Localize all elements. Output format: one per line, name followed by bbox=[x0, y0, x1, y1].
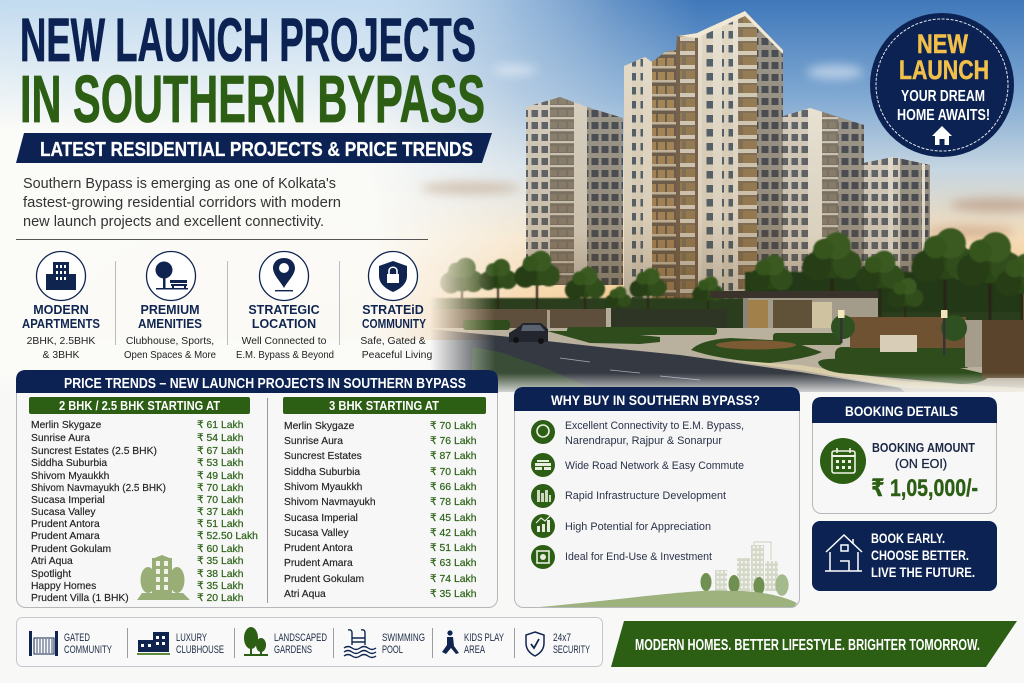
hedges and landscaping bbox=[463, 320, 990, 384]
reason: connectivity bbox=[531, 420, 744, 447]
column: 3 BHK prices: Merlin Skygaze bbox=[284, 421, 355, 432]
amenity: kids play area: KIDS PLAY bbox=[464, 632, 504, 644]
feature: strategic location bbox=[236, 252, 334, 361]
booking header bbox=[812, 397, 997, 423]
column: 2 BHK prices: Spotlight bbox=[31, 569, 71, 580]
feature: modern apartments: MODERN bbox=[33, 303, 89, 317]
reason: road network: Wide Road Network & Easy Commute bbox=[565, 460, 744, 472]
reason: appreciation bbox=[531, 514, 711, 538]
feature: strategic location: Well Connected to bbox=[242, 336, 327, 347]
callout: book early bbox=[812, 521, 997, 591]
tower: left bbox=[526, 95, 624, 290]
column: 2 BHK prices: ₹ 51 Lakh bbox=[197, 519, 244, 530]
column: 3 BHK prices: ₹ 51 Lakh bbox=[430, 543, 477, 554]
bottom fade bbox=[0, 373, 1024, 397]
column: 2 BHK prices: Siddha Suburbia bbox=[31, 458, 107, 469]
column: 2 BHK prices: Atri Aqua bbox=[31, 556, 73, 567]
feature: modern apartments: & 3BHK bbox=[43, 350, 80, 361]
column: 2 BHK prices: Happy Homes bbox=[31, 581, 96, 592]
column: 3 BHK prices: 3 BHK STARTING AT bbox=[329, 398, 439, 413]
panel: booking details bbox=[812, 397, 997, 514]
column: 2 BHK prices: ₹ 49 Lakh bbox=[197, 471, 244, 482]
column: 2 BHK prices: ₹ 20 Lakh bbox=[197, 593, 244, 604]
reason: infrastructure: Rapid Infrastructure Development bbox=[565, 490, 726, 502]
entrance pavilion bbox=[710, 291, 878, 328]
amenity: kids play area bbox=[442, 630, 504, 656]
title: NEW LAUNCH PROJECTS bbox=[20, 6, 476, 74]
subtitle banner: LATEST RESIDENTIAL PROJECTS & PRICE TRENDS bbox=[40, 138, 473, 161]
divider line bbox=[16, 239, 428, 240]
badge: new launch: NEW bbox=[917, 29, 968, 59]
column: 2 BHK prices: Sucasa Imperial bbox=[31, 495, 105, 506]
reason: connectivity: Excellent Connectivity to E.M. Bypass, bbox=[565, 420, 744, 432]
amenity: landscaped gardens: GARDENS bbox=[274, 644, 312, 656]
column: 2 BHK prices: ₹ 61 Lakh bbox=[197, 420, 244, 431]
icon: home bbox=[932, 126, 952, 145]
price panel header bbox=[16, 370, 498, 393]
callout text: CHOOSE BETTER. bbox=[871, 548, 969, 563]
column: 2 BHK prices: ₹ 67 Lakh bbox=[197, 446, 244, 457]
feature: community: Safe, Gated & bbox=[360, 336, 426, 347]
intro paragraph bbox=[23, 175, 341, 230]
column: 2 BHK prices: ₹ 35 Lakh bbox=[197, 581, 244, 592]
amenity: gated community: COMMUNITY bbox=[64, 644, 112, 656]
feature: premium amenities: PREMIUM bbox=[140, 303, 200, 317]
column: 3 BHK prices: Sucasa Imperial bbox=[284, 513, 358, 524]
amenity: swimming pool bbox=[344, 630, 425, 658]
ground masked group: trees, fence, road, hedges bbox=[420, 228, 1024, 392]
column: 3 BHK prices: Suncrest Estates bbox=[284, 451, 362, 462]
reason: road network bbox=[531, 453, 744, 477]
feature: modern apartments bbox=[22, 252, 100, 361]
feature: strategic location: LOCATION bbox=[252, 317, 316, 331]
booking amount text: ₹ 1,05,000/- bbox=[871, 475, 978, 502]
column: 3 BHK prices: Sunrise Aura bbox=[284, 436, 343, 447]
feature: community: COMMUNITY bbox=[362, 317, 427, 331]
amenity: security: SECURITY bbox=[553, 644, 590, 656]
amenity: gated community: GATED bbox=[64, 632, 90, 644]
tower: centre bbox=[624, 10, 784, 305]
feature: premium amenities: Clubhouse, Sports, bbox=[126, 336, 214, 347]
column: 3 BHK prices: ₹ 42 Lakh bbox=[430, 528, 477, 539]
column: 2 BHK prices: Merlin Skygaze bbox=[31, 420, 102, 431]
column: 2 BHK prices: ₹ 60 Lakh bbox=[197, 544, 244, 555]
tagline banner bbox=[611, 621, 1017, 667]
column: 3 BHK prices bbox=[283, 397, 486, 600]
column: 3 BHK prices: Prudent Antora bbox=[284, 543, 353, 554]
feature: community: Peaceful Living bbox=[362, 350, 432, 361]
subtitle banner bbox=[16, 133, 492, 163]
amenity: luxury clubhouse: CLUBHOUSE bbox=[176, 644, 224, 656]
callout text bbox=[871, 531, 975, 580]
tower: right bbox=[783, 108, 864, 273]
amenity: gated community bbox=[29, 631, 112, 656]
flower bed bbox=[716, 340, 796, 350]
booking header: BOOKING DETAILS bbox=[845, 403, 958, 419]
why buy header: WHY BUY IN SOUTHERN BYPASS? bbox=[551, 392, 760, 408]
hero photo: residential towers at sunset bbox=[0, 0, 1024, 397]
feature: community: STRATEiD bbox=[362, 303, 424, 317]
column: 2 BHK prices: Suncrest Estates (2.5 BHK) bbox=[31, 446, 157, 457]
title bbox=[20, 6, 485, 137]
reason: connectivity: Narendrapur, Rajpur & Sonarpur bbox=[565, 435, 722, 447]
amenity: landscaped gardens: LANDSCAPED bbox=[274, 632, 327, 644]
column: 2 BHK prices: Prudent Amara bbox=[31, 531, 100, 542]
callout text: BOOK EARLY. bbox=[871, 531, 945, 546]
amenity: security: 24x7 bbox=[553, 632, 571, 644]
feature: modern apartments: 2BHK, 2.5BHK bbox=[27, 336, 95, 347]
icon: house bbox=[825, 535, 862, 571]
feature: premium amenities: AMENITIES bbox=[138, 317, 202, 331]
icon: calendar bbox=[820, 438, 866, 484]
fence bbox=[440, 308, 709, 328]
column: 2 BHK prices: Prudent Villa (1 BHK) bbox=[31, 593, 129, 604]
column: 3 BHK prices: ₹ 45 Lakh bbox=[430, 513, 477, 524]
column: 3 BHK prices: Prudent Gokulam bbox=[284, 574, 364, 585]
column: 2 BHK prices: ₹ 35 Lakh bbox=[197, 556, 244, 567]
amenity: luxury clubhouse: LUXURY bbox=[176, 632, 207, 644]
column: 3 BHK prices: Prudent Amara bbox=[284, 558, 353, 569]
icon: building and trees bbox=[137, 555, 190, 600]
column: 2 BHK prices: Prudent Gokulam bbox=[31, 544, 111, 555]
feature: modern apartments: APARTMENTS bbox=[22, 317, 100, 331]
badge: new launch bbox=[870, 13, 1014, 157]
intro paragraph: Southern Bypass is emerging as one of Kolkata's bbox=[23, 175, 336, 192]
column: 3 BHK prices: ₹ 74 Lakh bbox=[430, 574, 477, 585]
intro paragraph: fastest-growing residential corridors with modern bbox=[23, 194, 341, 211]
title: IN SOUTHERN BYPASS bbox=[20, 62, 485, 137]
panel: why buy bbox=[514, 387, 800, 608]
reason: infrastructure bbox=[531, 484, 726, 508]
column: 3 BHK prices: Siddha Suburbia bbox=[284, 467, 360, 478]
reason: appreciation: High Potential for Appreciation bbox=[565, 521, 711, 533]
amenity: luxury clubhouse bbox=[137, 632, 224, 656]
column: 2 BHK prices: Shivom Myaukkh bbox=[31, 471, 110, 482]
badge: new launch: YOUR DREAM bbox=[901, 88, 985, 105]
column: 3 BHK prices: Atri Aqua bbox=[284, 589, 326, 600]
booking amount text: BOOKING AMOUNT bbox=[872, 441, 975, 455]
city illustration bbox=[540, 542, 797, 607]
column: 2 BHK prices: Sunrise Aura bbox=[31, 433, 90, 444]
amenity: security bbox=[526, 632, 590, 656]
column: 2 BHK prices: ₹ 70 Lakh bbox=[197, 495, 244, 506]
tower: far right bbox=[864, 157, 930, 273]
column: 3 BHK prices: Shivom Myaukkh bbox=[284, 482, 363, 493]
column: 2 BHK prices: Shivom Navmayukh (2.5 BHK) bbox=[31, 483, 166, 494]
column: 2 BHK prices: ₹ 70 Lakh bbox=[197, 483, 244, 494]
reason: end-use and investment: Ideal for End-Use & Investment bbox=[565, 551, 712, 563]
badge: new launch: LAUNCH bbox=[899, 55, 989, 85]
column: 3 BHK prices: ₹ 35 Lakh bbox=[430, 589, 477, 600]
amenity: swimming pool: SWIMMING bbox=[382, 632, 425, 644]
column: 2 BHK prices: ₹ 37 Lakh bbox=[197, 507, 244, 518]
column: 3 BHK prices: Shivom Navmayukh bbox=[284, 497, 376, 508]
column: 3 BHK prices: ₹ 87 Lakh bbox=[430, 451, 477, 462]
panel: price trends bbox=[16, 370, 498, 608]
feature: community bbox=[360, 252, 432, 361]
badge: new launch: HOME AWAITS! bbox=[897, 107, 990, 124]
feature: strategic location: STRATEGIC bbox=[248, 303, 320, 317]
feature: premium amenities bbox=[124, 252, 216, 361]
column: 2 BHK prices: ₹ 38 Lakh bbox=[197, 569, 244, 580]
column: 2 BHK prices bbox=[29, 397, 258, 604]
column: 2 BHK prices: Prudent Antora bbox=[31, 519, 100, 530]
feature: strategic location: E.M. Bypass & Beyond bbox=[236, 350, 334, 361]
column: 2 BHK prices: 2 BHK / 2.5 BHK STARTING AT bbox=[59, 398, 220, 413]
amenity: kids play area: AREA bbox=[464, 644, 486, 656]
tree line bbox=[420, 228, 1024, 332]
column: 3 BHK prices: ₹ 63 Lakh bbox=[430, 558, 477, 569]
ground and road bbox=[420, 328, 1024, 392]
booking amount text bbox=[871, 441, 978, 502]
column: 2 BHK prices: ₹ 53 Lakh bbox=[197, 458, 244, 469]
column: 3 BHK prices: Sucasa Valley bbox=[284, 528, 349, 539]
car bbox=[509, 323, 548, 344]
column: 2 BHK prices: ₹ 52.50 Lakh bbox=[197, 531, 258, 542]
column: 3 BHK prices: ₹ 70 Lakh bbox=[430, 421, 477, 432]
reason: end-use and investment bbox=[531, 545, 712, 569]
feature row bbox=[22, 252, 432, 361]
column: 3 BHK prices: ₹ 76 Lakh bbox=[430, 436, 477, 447]
column: 3 BHK prices: ₹ 66 Lakh bbox=[430, 482, 477, 493]
intro paragraph: new launch projects and excellent connectivity. bbox=[23, 213, 324, 230]
price panel header: PRICE TRENDS – NEW LAUNCH PROJECTS IN SOUTHERN BYPASS bbox=[64, 376, 466, 392]
column: 3 BHK prices: ₹ 70 Lakh bbox=[430, 467, 477, 478]
column: 3 BHK prices: ₹ 78 Lakh bbox=[430, 497, 477, 508]
feature: premium amenities: Open Spaces & More bbox=[124, 350, 216, 361]
boundary wall with sign bbox=[831, 310, 1024, 378]
panel: amenities strip bbox=[16, 618, 602, 666]
callout text: LIVE THE FUTURE. bbox=[871, 565, 975, 580]
column: 2 BHK prices: Sucasa Valley bbox=[31, 507, 96, 518]
booking amount text: (ON EOI) bbox=[895, 457, 947, 471]
column: 2 BHK prices: ₹ 54 Lakh bbox=[197, 433, 244, 444]
amenity: swimming pool: POOL bbox=[382, 644, 403, 656]
amenity: landscaped gardens bbox=[244, 627, 327, 656]
why buy header bbox=[514, 387, 800, 411]
